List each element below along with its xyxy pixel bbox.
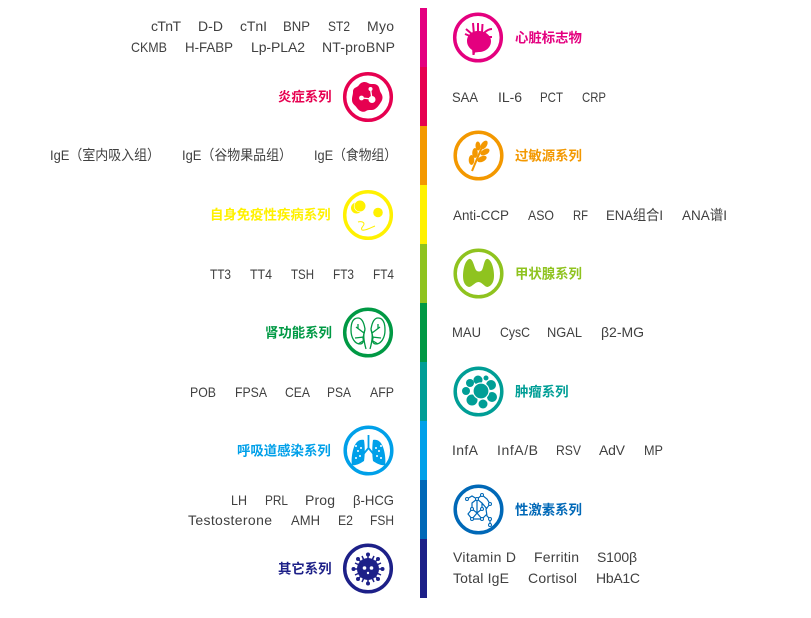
tumour list [190,384,394,400]
icon: virus [345,545,391,592]
cardiac marker list: H-FABP [185,39,233,55]
allergen list: IgE（食物组） [314,147,397,163]
autoimmune list [453,207,727,223]
other list: Vitamin D [453,549,516,565]
respiratory list [452,442,663,458]
cardiac marker list: BNP [283,18,310,34]
cardiac marker list: CKMB [131,39,167,55]
heading: respiratory: 呼吸道感染系列 [237,442,331,458]
tumour list: CEA [285,384,311,400]
respiratory list: InfA/B [497,442,538,458]
hormone list: FSH [370,512,394,528]
hormone list: Prog [305,492,335,508]
cardiac marker list: ST2 [328,18,350,34]
autoimmune list: ENA组合I [606,207,663,223]
hormone list: β-HCG [353,492,394,508]
icon: kidneys [345,309,391,356]
autoimmune list: RF [573,207,588,223]
other list [453,549,640,586]
tumour list: POB [190,384,216,400]
inflammation list [452,89,606,105]
allergen list: IgE（谷物果品组） [182,147,292,163]
autoimmune list: ANA谱I [682,207,727,223]
other list: Ferritin [534,549,579,565]
kidney list: β2-MG [601,324,644,340]
hormone list: AMH [291,512,320,528]
icon: lungs [345,427,392,474]
cardiac marker list: NT-proBNP [322,39,395,55]
inflammation list: PCT [540,89,563,105]
hormone list: E2 [338,512,353,528]
respiratory list: AdV [599,442,626,458]
cardiac marker list: Lp-PLA2 [251,39,305,55]
thyroid list: FT3 [333,266,354,282]
icon: tumour [455,368,502,415]
thyroid list: TSH [291,266,314,282]
thyroid list [210,266,394,282]
cardiac marker list: cTnI [240,18,267,34]
icon: autoimmune [345,192,391,238]
allergen list [50,147,397,163]
inflammation list: CRP [582,89,606,105]
cardiac marker list: cTnT [151,18,181,34]
thyroid list: TT4 [250,266,272,282]
icon: thyroid [455,250,502,297]
heading: other: 其它系列 [278,560,332,576]
respiratory list: InfA [452,442,479,458]
icon: grain [455,132,502,179]
autoimmune list: ASO [528,207,554,223]
heading: kidney function: 肾功能系列 [265,324,332,340]
thyroid list: FT4 [373,266,394,282]
cardiac marker list: Myo [367,18,394,34]
kidney list: CysC [500,324,530,340]
other list: S100β [597,549,637,565]
heading: thyroid: 甲状腺系列 [515,266,582,282]
inflammation list: SAA [452,89,479,105]
heading: inflammation: 炎症系列 [278,88,332,104]
heading: allergens: 过敏源系列 [515,148,582,164]
respiratory list: RSV [556,442,582,458]
kidney list [452,324,644,340]
inflammation list: IL-6 [498,89,522,105]
tumour list: PSA [327,384,352,400]
icon: molecule [455,486,502,533]
heading: tumour: 肿瘤系列 [515,384,569,400]
hormone list: Testosterone [188,512,272,528]
heading: sex hormones: 性激素系列 [515,502,582,518]
autoimmune list: Anti-CCP [453,207,509,223]
hormone list [188,492,394,528]
icon: inflammation [345,74,391,120]
hormone list: LH [231,492,247,508]
respiratory list: MP [644,442,663,458]
cardiac marker list [131,18,395,55]
tumour list: AFP [370,384,394,400]
kidney list: MAU [452,324,481,340]
other list: HbA1C [596,570,640,586]
heading: autoimmune: 自身免疫性疾病系列 [210,206,331,222]
hormone list: PRL [265,492,288,508]
heading: cardiac markers: 心脏标志物 [515,30,582,46]
icon: heart [455,14,501,61]
other list: Cortisol [528,570,577,586]
kidney list: NGAL [547,324,582,340]
allergen list: IgE（室内吸入组） [50,147,160,163]
cardiac marker list: D-D [198,18,223,34]
thyroid list: TT3 [210,266,231,282]
tumour list: FPSA [235,384,268,400]
central colour bar [420,8,427,598]
other list: Total IgE [453,570,509,586]
